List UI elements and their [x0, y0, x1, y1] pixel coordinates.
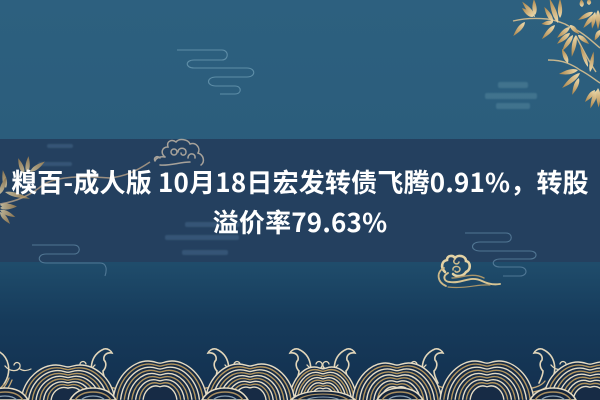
icon: gold scroll cloud: [439, 256, 500, 287]
decorative cloud bars: band left: [38, 144, 240, 255]
title: [11, 163, 589, 240]
wave crests: [0, 349, 577, 400]
wave border: [0, 349, 600, 400]
icon: bamboo top right: [512, 0, 600, 109]
background band: [0, 139, 600, 262]
title: 糗百-成人版 10月18日宏发转债飞腾0.91%，转股: [11, 163, 589, 200]
icon: bamboo left edge: [0, 156, 150, 225]
back wave row: [21, 361, 600, 400]
title: 溢价率79.63%: [213, 203, 387, 240]
front wave row: [0, 388, 576, 400]
decorative cloud lines: lower left: [32, 245, 106, 276]
decorative cloud bars: upper right: [485, 82, 537, 109]
icon: grey scroll cloud: [154, 140, 203, 165]
decorative cloud lines: lower right: [465, 233, 536, 276]
decorative cloud lines: upper centre: [177, 50, 254, 94]
